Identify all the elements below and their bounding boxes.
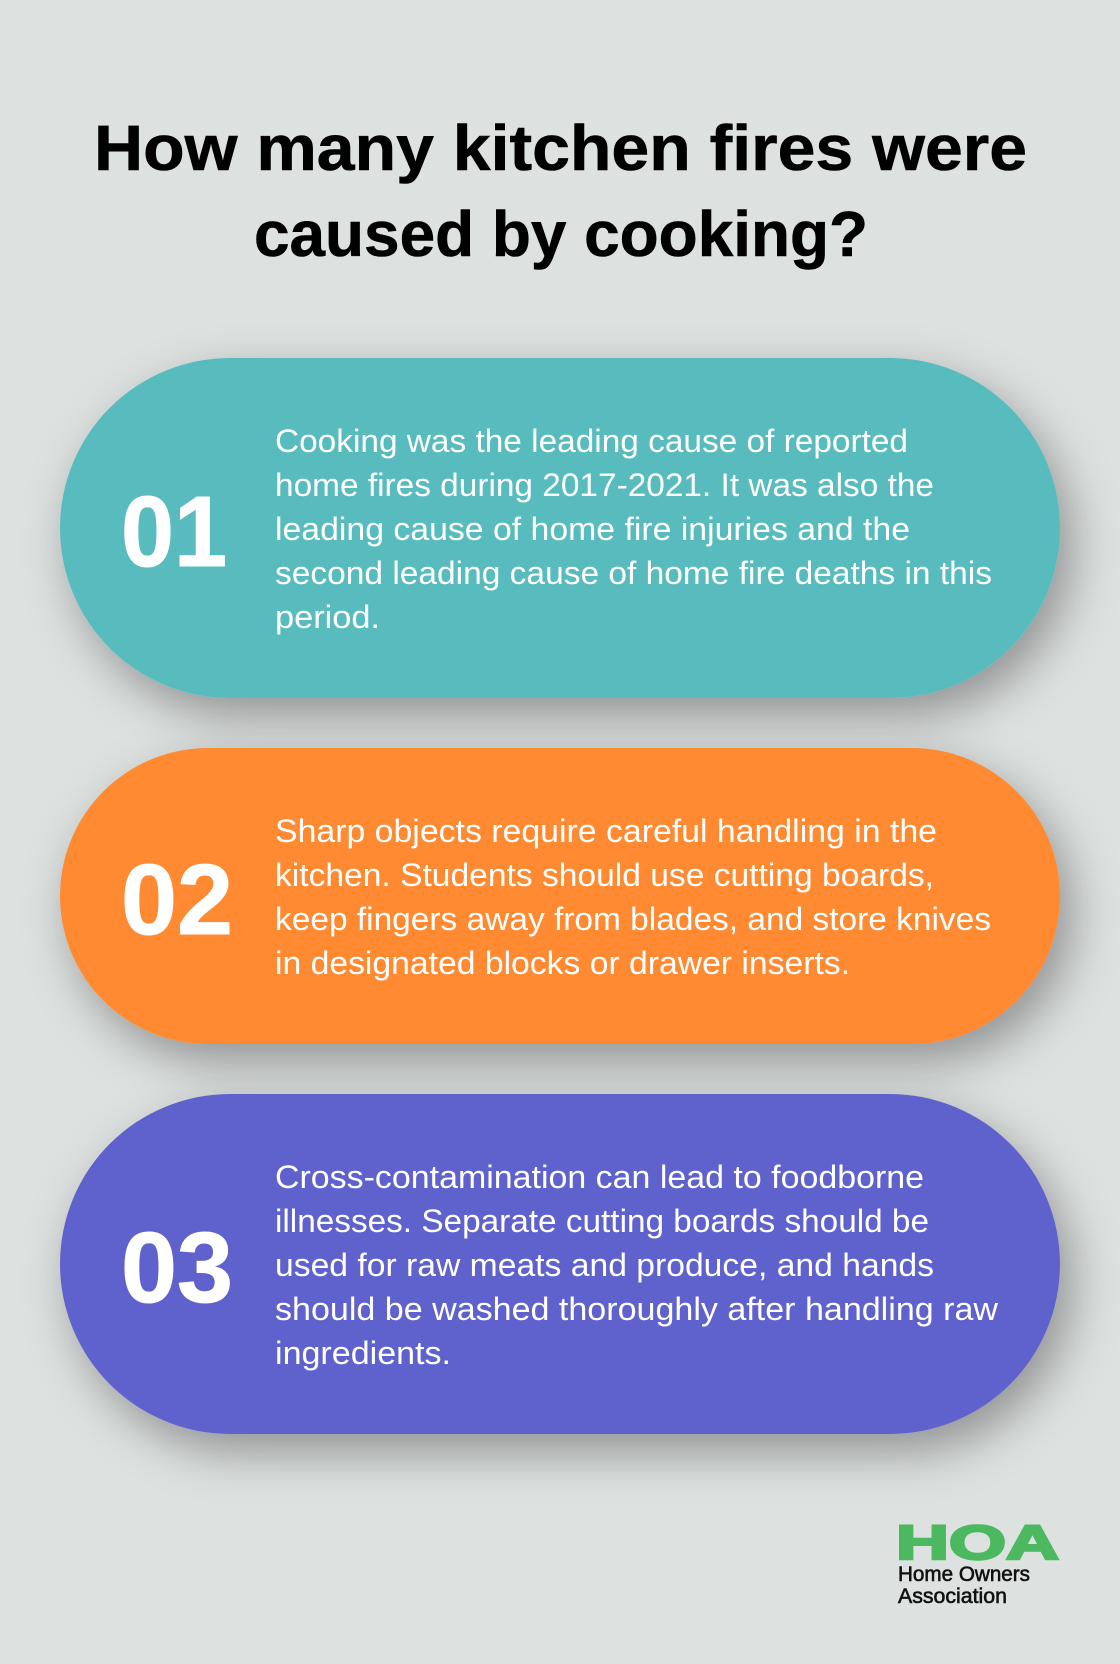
panel: step 01 <box>60 358 1060 698</box>
number 01: 01 <box>121 476 227 588</box>
number 02: 02 <box>121 844 233 956</box>
text block: step 03: ingredients. <box>275 1335 451 1371</box>
text block: step 01: second leading cause of home fire deaths in this <box>275 555 992 591</box>
text block: step 03: illnesses. Separate cutting boards should be <box>275 1203 929 1239</box>
text block: step 01: leading cause of home fire injuries and the <box>275 511 910 547</box>
text block: step 01: period. <box>275 599 380 635</box>
text block: step 03: Cross-contamination can lead to foodborne <box>275 1159 924 1195</box>
text block: step 02 <box>275 813 991 981</box>
number 03: 03 <box>121 1212 233 1324</box>
logo: HOA Home Owners Association: HOA <box>896 1517 1059 1570</box>
text block: step 03: used for raw meats and produce, and hands <box>275 1247 934 1283</box>
title: caused by cooking? <box>254 198 868 270</box>
title: How many kitchen fires were <box>94 112 1027 184</box>
text block: step 02: Sharp objects require careful handling in the <box>275 813 937 849</box>
logo: HOA Home Owners Association: Home Owners <box>898 1563 1030 1586</box>
text block: step 02: kitchen. Students should use cutting boards, <box>275 857 934 893</box>
logo: HOA Home Owners Association: Association <box>898 1585 1007 1608</box>
panel shape: teal pill <box>60 358 1060 698</box>
text block: step 01: Cooking was the leading cause of reported <box>275 423 908 459</box>
panel shape: orange pill <box>60 748 1060 1044</box>
text block: step 03 <box>275 1159 999 1371</box>
logo: HOA Home Owners Association <box>896 1517 1059 1608</box>
text block: step 02: in designated blocks or drawer inserts. <box>275 945 850 981</box>
panel: step 02 <box>60 748 1060 1044</box>
text block: step 01: home fires during 2017-2021. It was also the <box>275 467 934 503</box>
text block: step 02: keep fingers away from blades, and store knives <box>275 901 991 937</box>
title <box>94 112 1027 270</box>
panel: step 03 <box>60 1094 1060 1434</box>
panel shape: purple pill <box>60 1094 1060 1434</box>
text block: step 01 <box>275 423 992 635</box>
text block: step 03: should be washed thoroughly after handling raw <box>275 1291 999 1327</box>
